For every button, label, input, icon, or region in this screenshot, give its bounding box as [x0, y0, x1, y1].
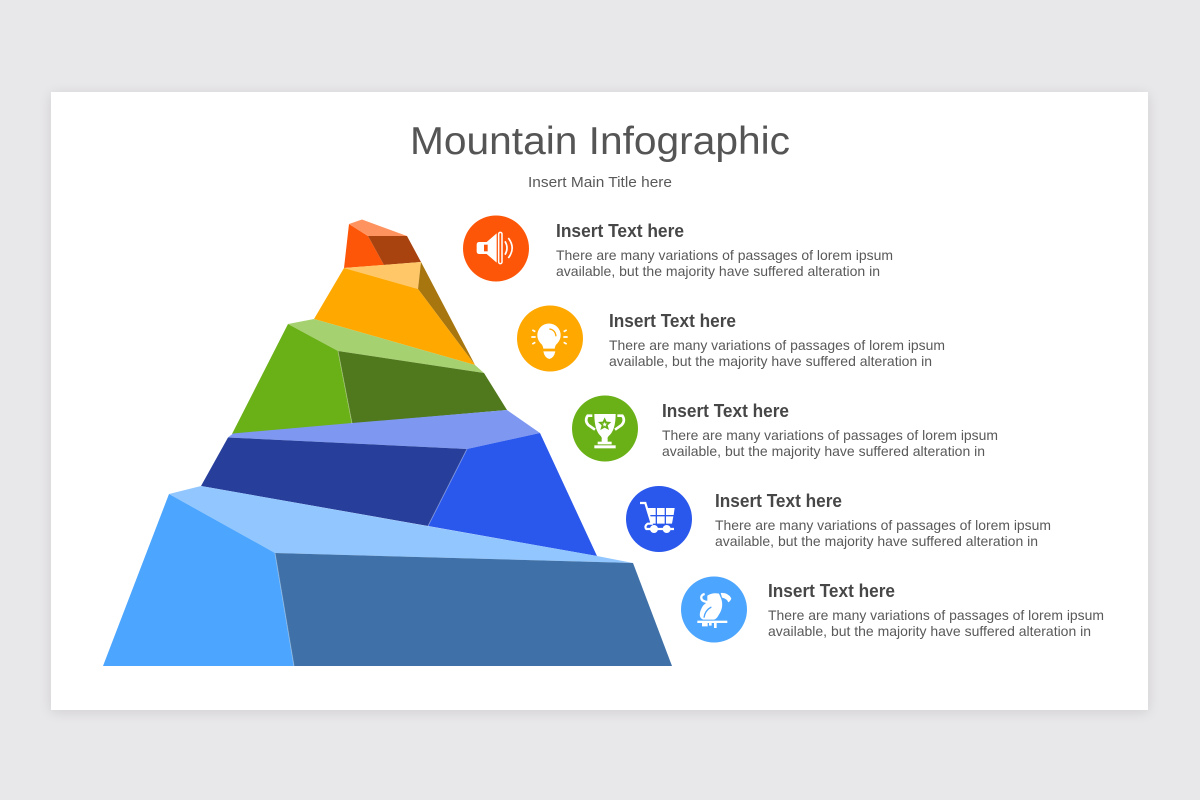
- icon: trophy: [572, 396, 638, 462]
- body text: available, but the majority have suffered alteration in: [768, 623, 1091, 639]
- heading: Insert Text here: [556, 221, 684, 241]
- mountain layer 1: peak: [344, 220, 421, 268]
- item 4: [626, 486, 1051, 552]
- title: Mountain Infographic: [410, 120, 790, 163]
- icon: megaphone speaker: [463, 216, 529, 282]
- mountain layer 2: orange: [314, 262, 475, 365]
- body text: [662, 427, 998, 459]
- body text: There are many variations of passages of lorem ipsum: [715, 517, 1051, 533]
- item 3: [572, 396, 998, 462]
- body text: available, but the majority have suffered alteration in: [556, 263, 880, 279]
- icon: light bulb: [517, 306, 583, 372]
- heading: Insert Text here: [662, 401, 789, 421]
- item 2: [517, 306, 945, 372]
- icon: parrot on perch: [681, 576, 747, 642]
- icon: shopping cart: [626, 486, 692, 552]
- body text: [715, 517, 1051, 549]
- item 5: [681, 576, 1104, 642]
- body text: available, but the majority have suffered alteration in: [662, 443, 985, 459]
- body text: There are many variations of passages of lorem ipsum: [768, 607, 1104, 623]
- body text: There are many variations of passages of lorem ipsum: [556, 247, 893, 263]
- item 1: [463, 216, 893, 282]
- panel: white slide card: [51, 92, 1148, 710]
- body text: There are many variations of passages of lorem ipsum: [609, 337, 945, 353]
- body text: There are many variations of passages of lorem ipsum: [662, 427, 998, 443]
- body text: [768, 607, 1104, 639]
- mountain layer 5: base: [103, 486, 672, 666]
- heading: Insert Text here: [609, 311, 736, 331]
- subtitle: Insert Main Title here: [528, 174, 672, 191]
- mountain layer 3: green: [232, 319, 507, 434]
- body text: [556, 247, 893, 279]
- heading: Insert Text here: [768, 581, 895, 601]
- mountain layer 4: blue: [201, 410, 597, 556]
- body text: available, but the majority have suffered alteration in: [715, 533, 1038, 549]
- body text: available, but the majority have suffered alteration in: [609, 353, 932, 369]
- heading: Insert Text here: [715, 491, 842, 511]
- body text: [609, 337, 945, 369]
- mountain chart: [103, 220, 672, 666]
